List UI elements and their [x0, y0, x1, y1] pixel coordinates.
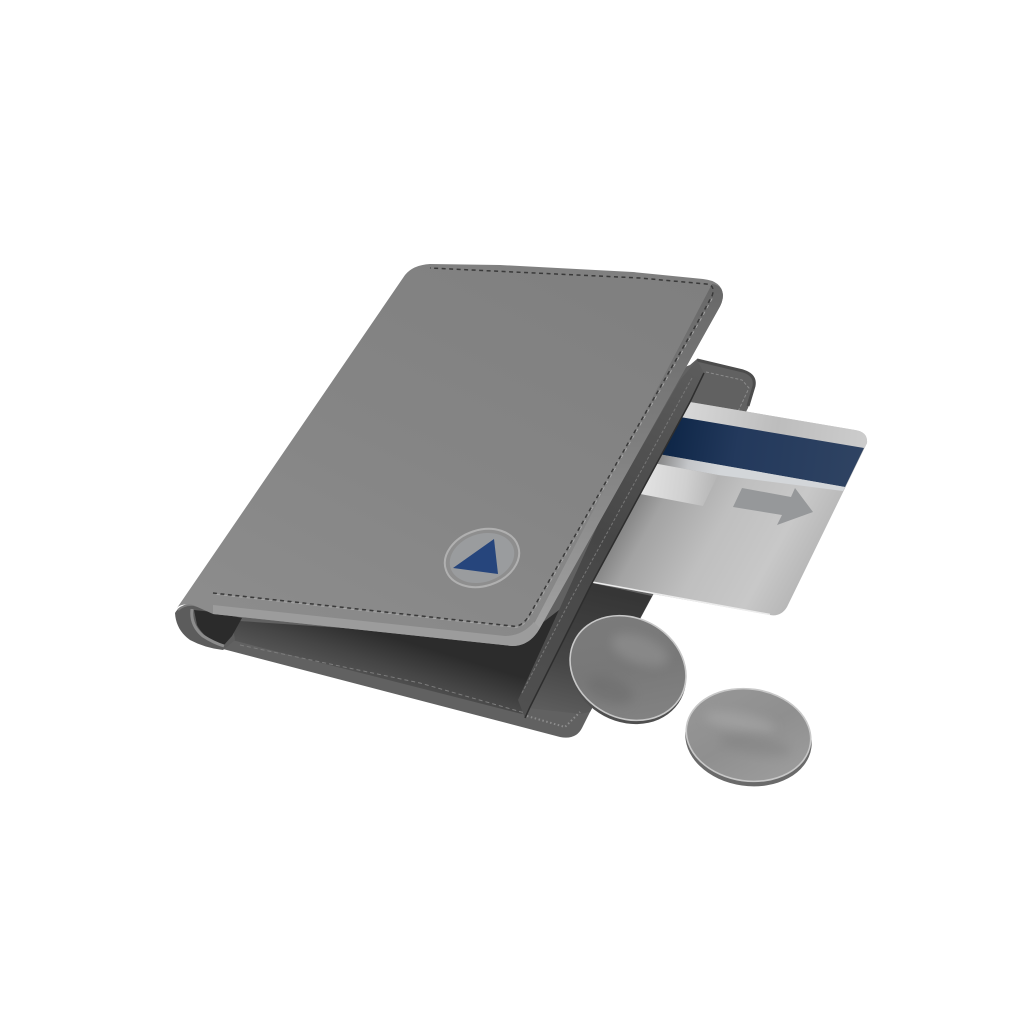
wallet back layer [180, 359, 755, 738]
back panel edge [697, 360, 754, 406]
coin two [679, 681, 818, 794]
inner right panel [528, 583, 652, 714]
card top band [679, 402, 867, 449]
card lower edge highlight [592, 582, 770, 614]
pocket strip [518, 360, 704, 718]
left fold [175, 604, 242, 650]
fold interior [194, 610, 242, 645]
metal card [592, 402, 867, 615]
coin one sheen [607, 627, 673, 673]
cover stitching [213, 268, 713, 626]
coin one [551, 596, 705, 744]
pocket edge line [525, 373, 704, 718]
fold inner roll [192, 609, 224, 646]
front cover [177, 264, 723, 646]
inner lining [225, 360, 704, 727]
logo badge [437, 520, 527, 596]
corner stitching [527, 712, 580, 727]
cover bottom rim [213, 605, 540, 646]
logo triangle [453, 539, 498, 574]
cover right rim [525, 284, 723, 642]
back panel stitching [706, 372, 749, 418]
magnetic stripe [658, 417, 864, 487]
coin two sheen [703, 707, 777, 737]
band under stripe [653, 454, 845, 491]
fold top highlight [178, 605, 213, 610]
lining stitching [240, 645, 525, 713]
signature bar [635, 463, 718, 506]
pocket stitching [522, 378, 692, 693]
card arrow [733, 488, 813, 525]
